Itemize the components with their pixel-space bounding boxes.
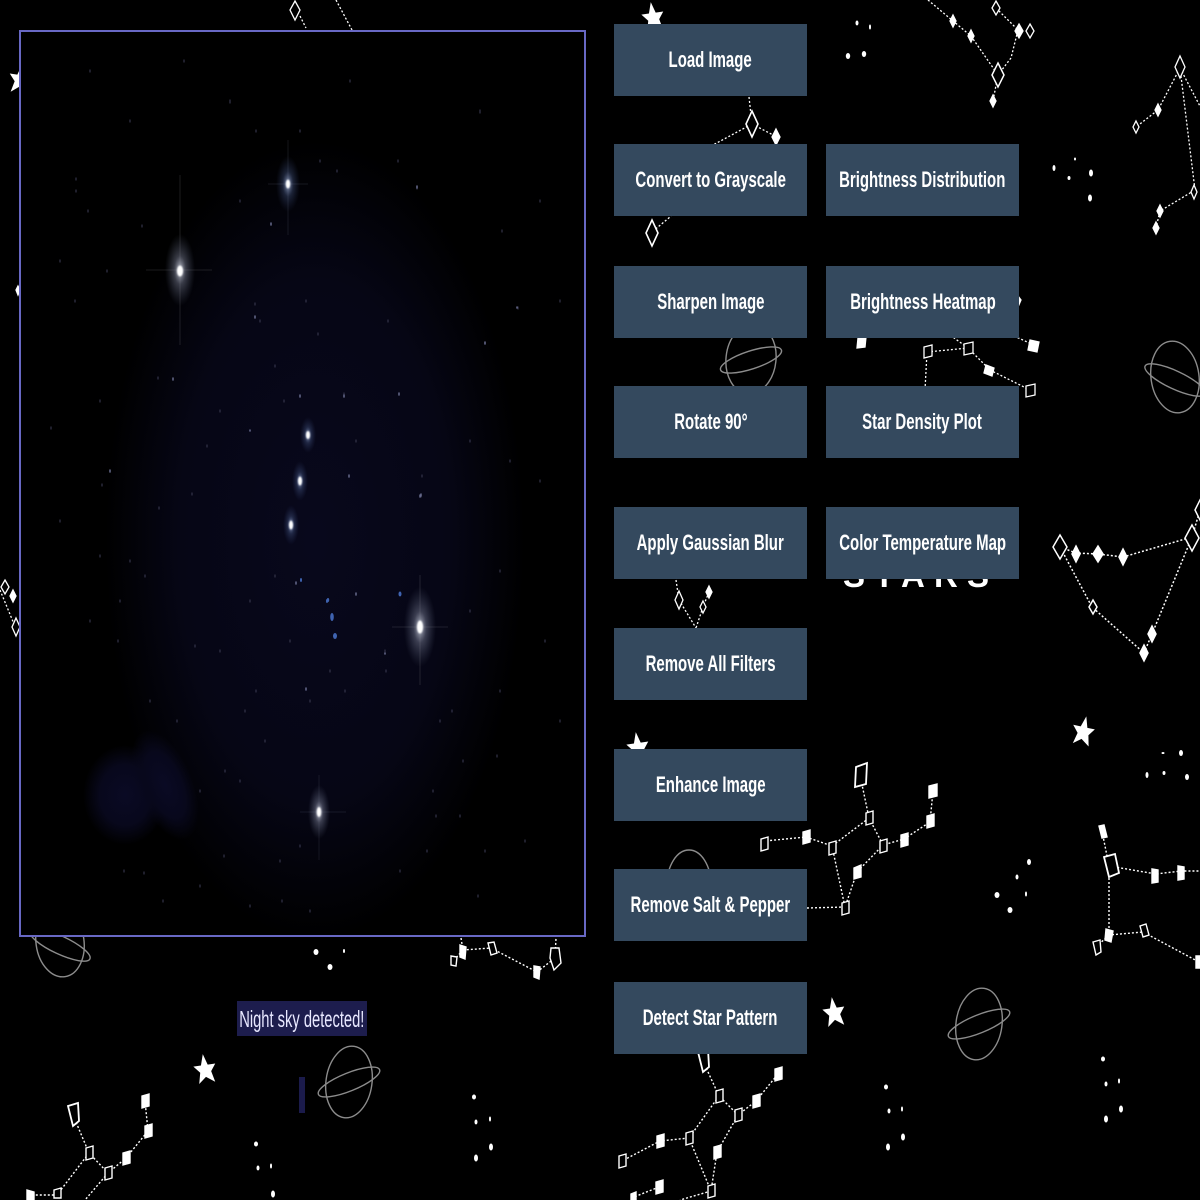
- button: Color Temperature Map: [826, 507, 1019, 579]
- bright star: left: [146, 175, 212, 345]
- button: Sharpen Image: Sharpen Image: [657, 289, 764, 314]
- bright star: upper: [268, 140, 308, 235]
- button: Brightness Heatmap: Brightness Heatmap: [850, 289, 995, 314]
- button: Detect Star Pattern: [614, 982, 807, 1054]
- planet: lower right: [945, 985, 1013, 1063]
- button: Convert to Grayscale: [614, 144, 807, 216]
- belt star: middle: [292, 461, 308, 501]
- constellation: right lower: [1093, 825, 1200, 968]
- planet: bottom-left under image panel: [26, 904, 94, 980]
- doodle star: right: [1069, 714, 1097, 747]
- doodle star: behind enhance button: [625, 731, 651, 762]
- panel border: [20, 31, 585, 936]
- sword stars: [300, 578, 402, 639]
- constellation: bottom centre: [619, 1049, 782, 1200]
- button: Rotate 90: Rotate 90°: [674, 409, 747, 434]
- constellation: bottom left: [27, 1094, 152, 1200]
- small dim bar under status message: [299, 1077, 305, 1113]
- bright star: lower: [300, 775, 346, 860]
- button: Load Image: Load Image: [669, 47, 752, 72]
- doodle star: near detect button: [821, 996, 847, 1027]
- belt star: top: [300, 417, 316, 453]
- constellation fragments: top and left edges: [0, 0, 352, 636]
- button: Convert to Grayscale: Convert to Grayscale: [635, 167, 786, 192]
- bright star: right: [392, 575, 448, 685]
- planet: right edge: [1141, 338, 1200, 416]
- button: Load Image: [614, 24, 807, 96]
- button: Brightness Distribution: Brightness Distribution: [839, 167, 1006, 192]
- constellation: below heatmap button: [857, 296, 1039, 397]
- button: Sharpen Image: [614, 266, 807, 338]
- button: Enhance Image: [614, 749, 807, 821]
- button: Brightness Distribution: [826, 144, 1019, 216]
- status message: Night sky detected!: [239, 1006, 365, 1032]
- button: Apply Gaussian Blur: [614, 507, 807, 579]
- button: Color Temperature Map: Color Temperature Map: [839, 530, 1006, 555]
- constellation: under image panel: [451, 938, 561, 979]
- star dot clusters: [254, 20, 1189, 1198]
- button: Detect Star Pattern: Detect Star Pattern: [643, 1005, 778, 1030]
- button: Remove Salt & Pepper: Remove Salt & Pepper: [631, 892, 790, 917]
- planet: under rotate button row: [718, 322, 784, 396]
- belt star: bottom: [283, 505, 299, 545]
- doodle star: left edge: [7, 63, 33, 94]
- constellation: top right: [1133, 56, 1200, 234]
- button: Apply Gaussian Blur: Apply Gaussian Blur: [637, 530, 784, 555]
- button: Remove All Filters: [614, 628, 807, 700]
- nebula glow: [83, 140, 525, 940]
- button: Brightness Heatmap: [826, 266, 1019, 338]
- hidden word STARS behind button: STARS: [843, 557, 989, 594]
- button: Star Density Plot: Star Density Plot: [863, 409, 982, 434]
- panel: night sky image: [19, 30, 586, 937]
- constellation: middle: [761, 763, 937, 915]
- constellation: right kite: [1053, 500, 1200, 661]
- constellation: top centre-right: [928, 0, 1034, 107]
- button: Enhance Image: Enhance Image: [656, 772, 765, 797]
- planet: bottom centre-left: [315, 1043, 383, 1121]
- button: Remove All Filters: Remove All Filters: [646, 651, 775, 676]
- constellation: below gaussian blur button: [675, 580, 712, 628]
- button: Star Density Plot: [826, 386, 1019, 458]
- button: Remove Salt & Pepper: [614, 869, 807, 941]
- faint background stars: [51, 60, 560, 912]
- doodle star: bottom left: [192, 1053, 218, 1084]
- button: Rotate 90: [614, 386, 807, 458]
- planet: behind salt and pepper button: [655, 850, 723, 920]
- constellation: behind upper buttons: [646, 97, 780, 246]
- doodle star: behind load button: [640, 1, 666, 32]
